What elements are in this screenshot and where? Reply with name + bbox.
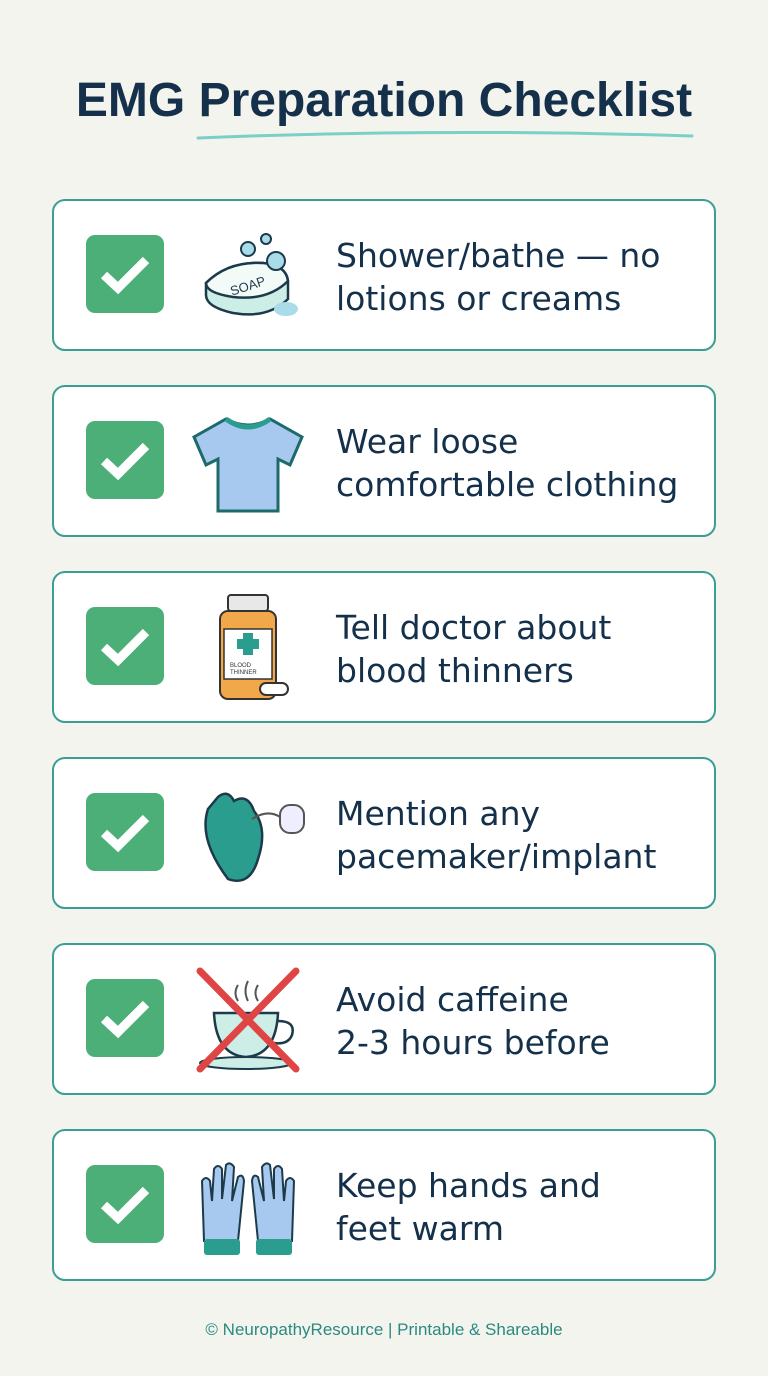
text: Tell doctor about <box>336 608 611 647</box>
card: clothing <box>52 385 716 537</box>
checkbox <box>86 979 164 1057</box>
text: Mention any <box>336 794 540 833</box>
icon: gloves <box>201 1162 295 1255</box>
footer: © NeuropathyResource | Printable & Shareable <box>205 1320 563 1339</box>
icon: crossed coffee <box>196 968 300 1072</box>
icon: heart <box>204 792 305 882</box>
card: caffeine <box>52 943 716 1095</box>
icon: pill bottle <box>219 594 289 700</box>
checkbox <box>86 607 164 685</box>
text: lotions or creams <box>336 279 621 318</box>
text <box>336 236 660 318</box>
card: blood thinners <box>52 571 716 723</box>
checkbox <box>86 1165 164 1243</box>
card: warm hands <box>52 1129 716 1281</box>
checkbox <box>86 793 164 871</box>
checkbox <box>86 235 164 313</box>
text <box>336 422 678 504</box>
title: EMG Preparation Checklist <box>76 74 692 127</box>
text: comfortable clothing <box>336 465 678 504</box>
text: pacemaker/implant <box>336 837 656 876</box>
text: 2-3 hours before <box>336 1023 610 1062</box>
icon: soap: SOAP <box>228 273 267 299</box>
text: Shower/bathe — no <box>336 236 660 275</box>
checkbox <box>86 421 164 499</box>
text <box>336 608 611 690</box>
text: blood thinners <box>336 651 574 690</box>
text <box>336 1166 601 1248</box>
icon: t-shirt <box>192 417 304 512</box>
icon: pill bottle: BLOOD <box>230 663 252 669</box>
text: Avoid caffeine <box>336 980 569 1019</box>
icon: pill bottle: THINNER <box>230 670 257 676</box>
title underline <box>196 131 694 140</box>
text: Keep hands and <box>336 1166 601 1205</box>
card: shower <box>52 199 716 351</box>
text <box>336 980 610 1062</box>
text: feet warm <box>336 1209 504 1248</box>
text <box>336 794 656 876</box>
text: Wear loose <box>336 422 518 461</box>
icon: soap <box>204 233 298 316</box>
card: pacemaker <box>52 757 716 909</box>
